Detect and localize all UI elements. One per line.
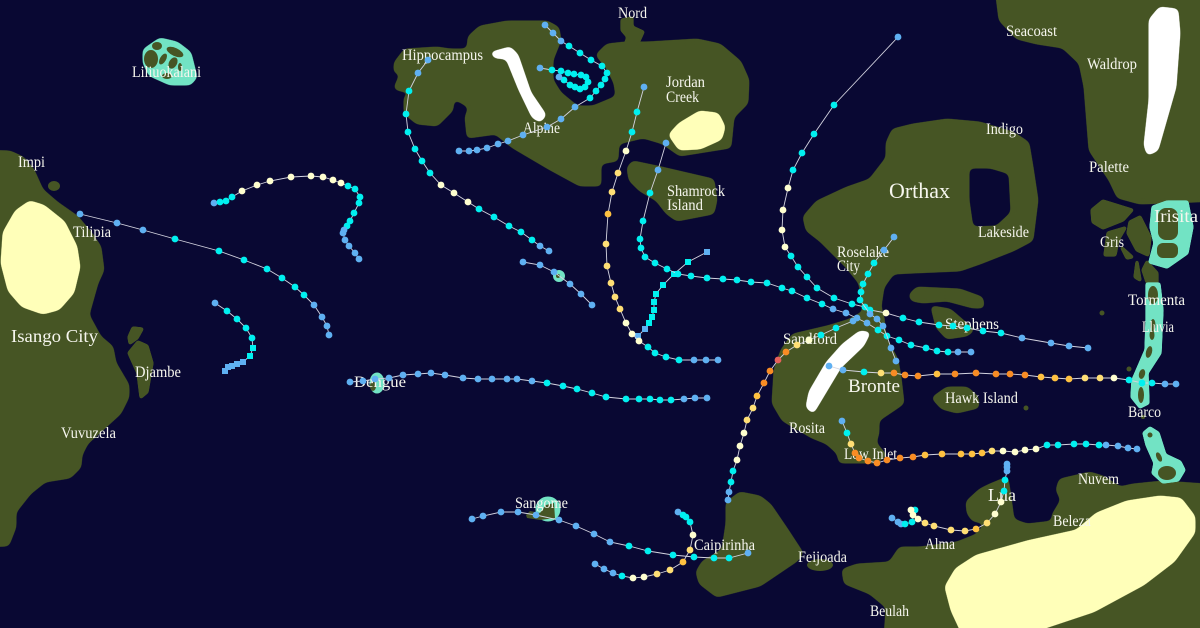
desert: Jordan Creek	[671, 113, 723, 148]
label: Feijoada: Feijoada	[798, 549, 847, 566]
label: Barco: Barco	[1128, 404, 1161, 421]
label: Palette: Palette	[1089, 159, 1129, 176]
label: Alma: Alma	[925, 536, 955, 553]
storm track: Roselake	[857, 234, 899, 364]
label: Beulah: Beulah	[870, 603, 909, 620]
label: Shamrock: Shamrock	[667, 183, 725, 200]
label: Sangome: Sangome	[515, 495, 568, 512]
land: north-east continent	[995, 0, 1200, 203]
storm track: upper-left arc	[211, 173, 363, 262]
label: Sandford: Sandford	[783, 331, 837, 348]
islets	[1024, 310, 1145, 419]
label: Caipirinha: Caipirinha	[694, 537, 755, 554]
desert: western continent	[3, 203, 78, 312]
label: Gris: Gris	[1100, 234, 1124, 251]
label: Vuvuzela: Vuvuzela	[61, 425, 116, 442]
atoll: Irisita	[1150, 202, 1192, 267]
land: southern continent	[843, 473, 1200, 628]
label: Beleza: Beleza	[1053, 513, 1091, 530]
label: Lua: Lua	[988, 485, 1016, 505]
label: Island: Island	[667, 197, 703, 214]
label: Lakeside: Lakeside	[978, 224, 1029, 241]
storm track: small central	[520, 259, 595, 308]
atoll: Tormenta, Lluvia, Barco	[1132, 284, 1162, 407]
label: Waldrop: Waldrop	[1087, 56, 1137, 73]
land: Hawk Island	[933, 388, 978, 412]
desert: southern continent	[947, 498, 1193, 628]
land: Shamrock Island	[628, 162, 716, 220]
label: Roselake: Roselake	[837, 244, 889, 261]
label: Isango City: Isango City	[11, 326, 98, 346]
label: Dengue: Dengue	[354, 374, 406, 391]
storm track: Shamrock to east	[637, 140, 974, 355]
island: Djambe	[129, 342, 152, 397]
storm track: square branch	[635, 249, 710, 339]
storm track: Hippocampus	[403, 57, 552, 254]
label: Stephens: Stephens	[945, 316, 999, 333]
storm track: bay loop	[537, 65, 591, 92]
label: Indigo: Indigo	[986, 121, 1023, 138]
storm track: Lua	[889, 461, 1010, 534]
label: Impi: Impi	[18, 154, 46, 171]
land: Nord	[622, 18, 643, 45]
ice: Alpine ridge	[492, 48, 545, 121]
label: Lluvia: Lluvia	[1142, 319, 1174, 336]
label: Bronte: Bronte	[848, 376, 900, 397]
label: Low Inlet: Low Inlet	[844, 446, 898, 463]
storm track: Alpine	[456, 22, 610, 154]
label: City: City	[837, 258, 860, 275]
land: Stephens	[932, 307, 973, 338]
ice: north-east ridge	[1145, 8, 1179, 154]
islands: Gris group	[1092, 201, 1157, 283]
storm track: Bronte to Barco	[826, 363, 1179, 387]
land: northern Hippocampus mass	[395, 22, 748, 185]
storm track: Jordan Creek	[603, 84, 721, 363]
label: Irisita: Irisita	[1154, 206, 1198, 226]
storm track: Tilipia	[77, 211, 332, 338]
label: Hippocampus: Hippocampus	[402, 47, 483, 64]
atoll: Sangome	[526, 498, 559, 520]
storm track: Dengue	[347, 370, 710, 403]
label: Nuvem: Nuvem	[1078, 471, 1119, 488]
label: Orthax: Orthax	[889, 178, 950, 203]
atoll: small near 555,275	[554, 272, 564, 280]
label: Djambe: Djambe	[135, 364, 181, 381]
land: Orthax and Bronte	[773, 120, 1037, 462]
storm track: Caipirinha hook	[592, 509, 696, 581]
island: north of Djambe	[129, 328, 142, 343]
storm track: Sandford	[725, 315, 860, 503]
label: Liliuokalani: Liliuokalani	[132, 64, 202, 81]
land: western continent	[0, 151, 128, 546]
label: Seacoast: Seacoast	[1006, 23, 1058, 40]
label: Creek: Creek	[666, 89, 699, 106]
storm track: Sangome	[469, 509, 751, 561]
storm track: Low Inlet	[839, 418, 1140, 466]
land: north of Stephens	[910, 288, 983, 307]
atoll: south-east	[1144, 428, 1184, 482]
islet near Impi	[48, 181, 60, 191]
storm track: lower-left hook	[212, 300, 256, 374]
label: Hawk Island: Hawk Island	[945, 390, 1018, 407]
label: Alpine: Alpine	[523, 120, 560, 137]
atoll: Liliuokalani	[144, 39, 196, 84]
label: Jordan: Jordan	[666, 74, 705, 91]
ice: Bronte ridge	[807, 332, 869, 412]
storm track: north-east long	[779, 34, 1091, 351]
label: Nord: Nord	[618, 5, 647, 22]
label: Rosita: Rosita	[789, 420, 825, 437]
atoll: Dengue	[370, 374, 383, 392]
land: Caipirinha	[697, 493, 833, 596]
label: Tilipia: Tilipia	[73, 224, 111, 241]
label: Tormenta: Tormenta	[1128, 292, 1185, 309]
